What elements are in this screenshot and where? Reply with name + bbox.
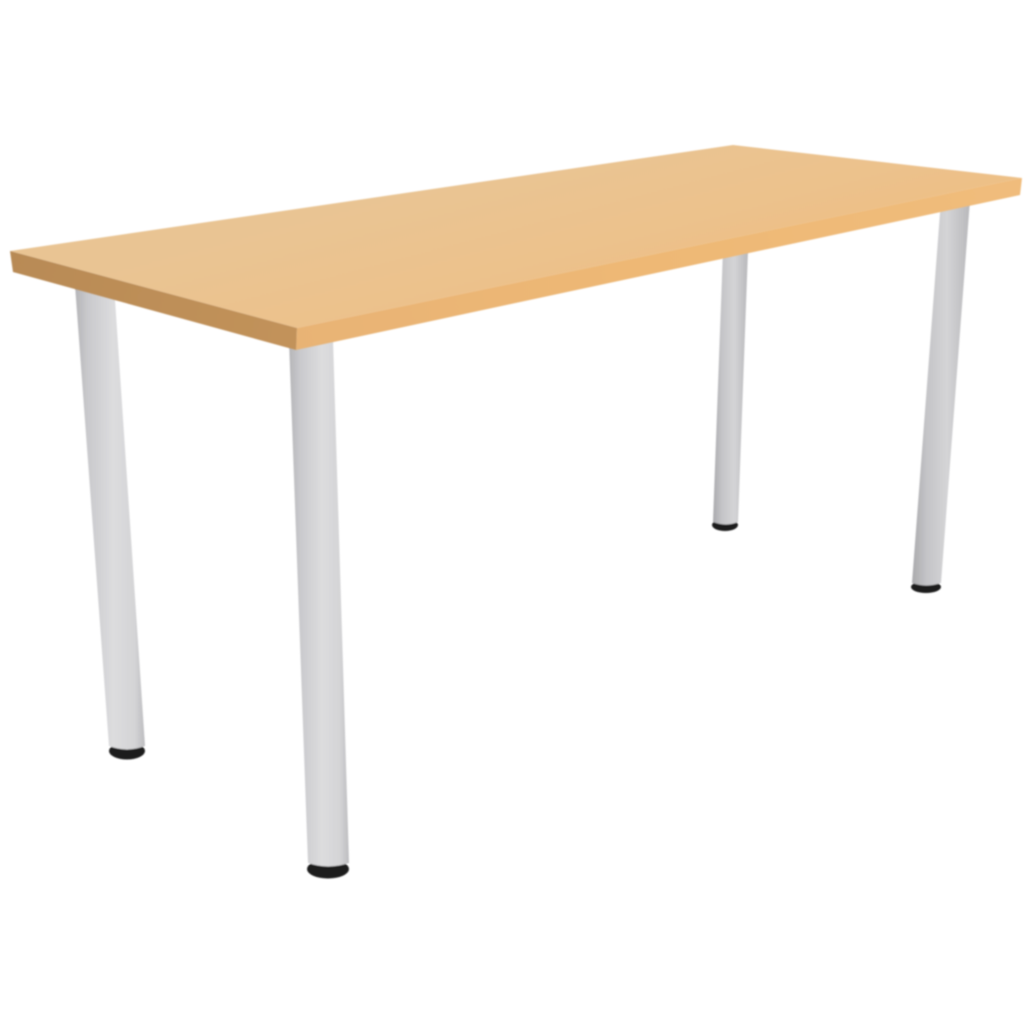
back left leg bbox=[712, 250, 748, 531]
top surface bbox=[10, 145, 1022, 328]
table top bbox=[10, 145, 1022, 350]
front long edge bbox=[296, 178, 1022, 350]
front right leg bbox=[289, 340, 349, 878]
front left leg bbox=[75, 285, 145, 760]
left short edge bbox=[10, 251, 297, 350]
back right leg bbox=[911, 200, 970, 593]
